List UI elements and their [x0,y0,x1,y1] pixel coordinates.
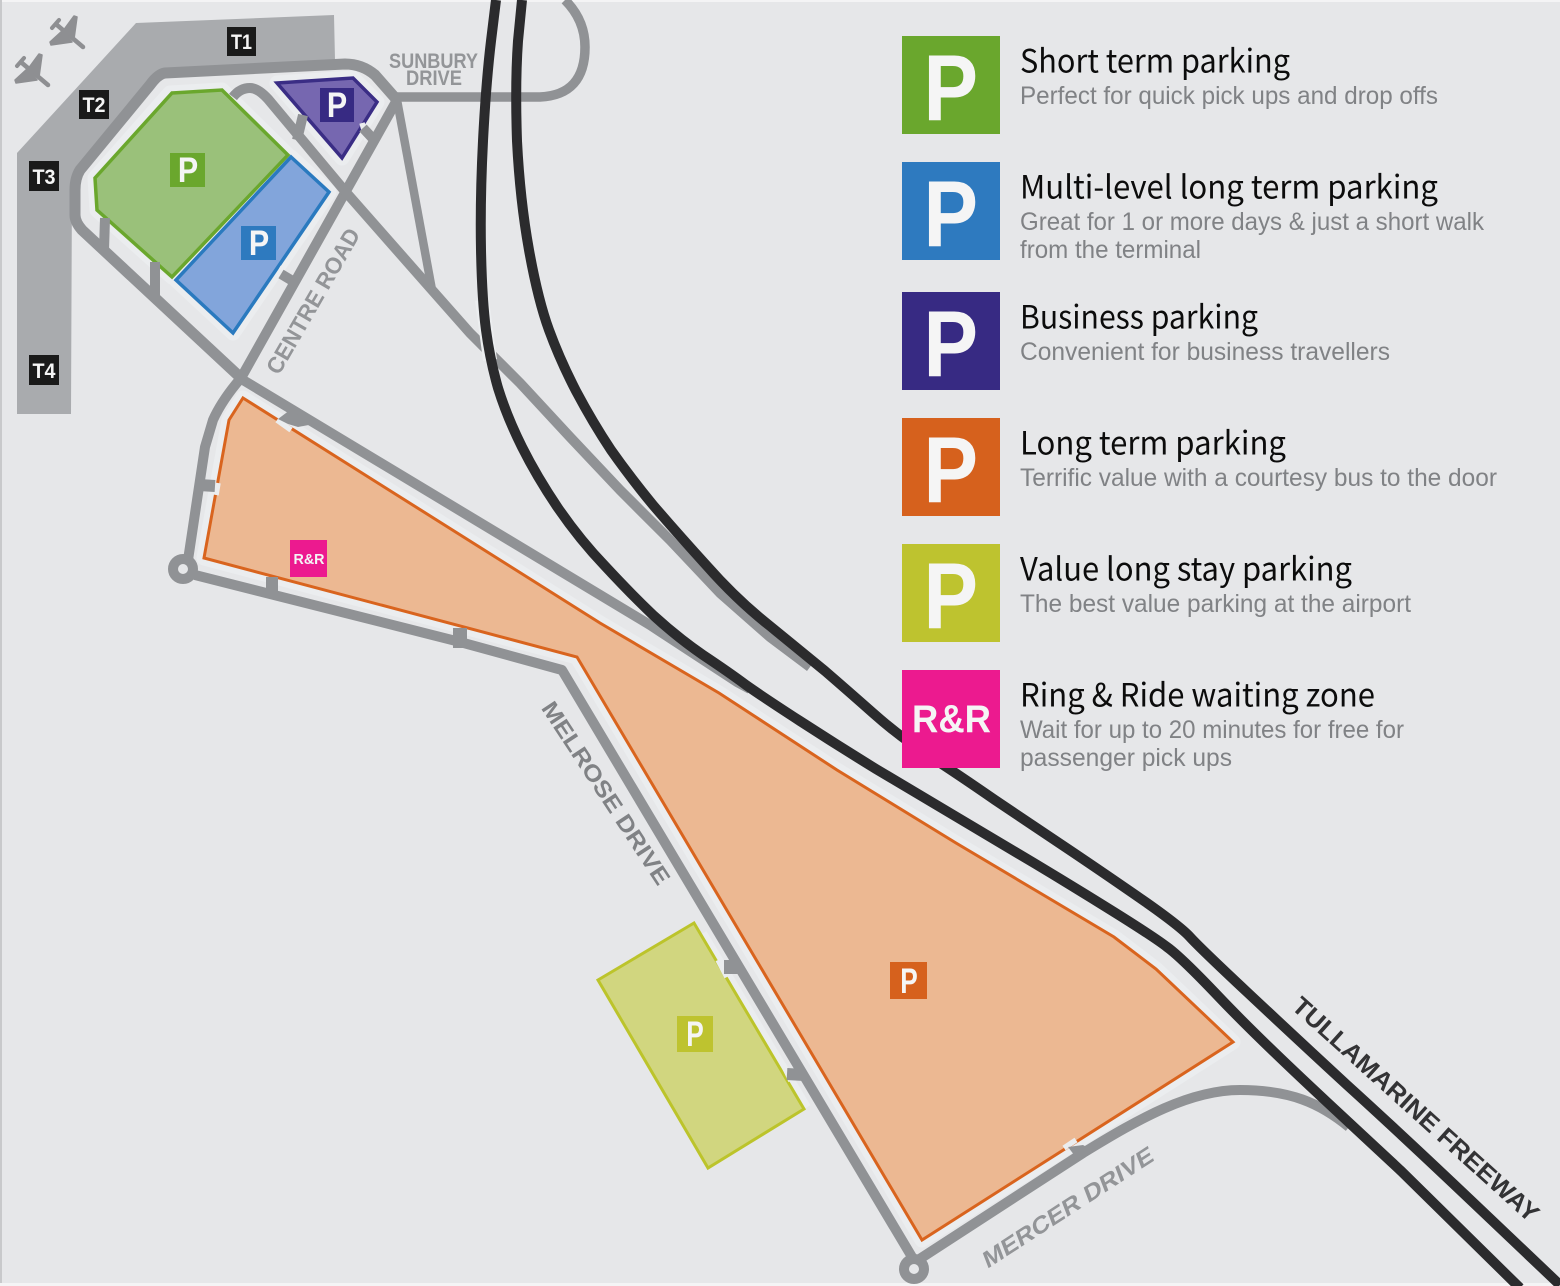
legend: ring and ride waiting zone [902,670,1404,772]
legend: value long stay parking: Value long stay parking [1020,544,1352,590]
road label: Centre Road: CENTRE ROAD [261,223,365,379]
parking area: multi-level (blue) [176,157,329,333]
map marker: business P: P [327,85,347,124]
legend: ring and ride waiting zone: R&R [912,698,991,741]
legend: multi-level long term parking: from the terminal [1020,236,1201,264]
legend: long term parking: P [924,417,978,522]
legend: value long stay parking: The best value parking at the airport [1020,590,1411,618]
map marker: multi-level P: P [249,223,269,262]
terminal marker T1: T1 [231,31,252,54]
road label: Tullamarine Freeway: TULLAMARINE FREEWAY [1286,992,1545,1228]
legend: short term parking: Short term parking [1020,36,1290,82]
legend: ring and ride waiting zone: passenger pick ups [1020,744,1232,772]
terminal marker T3 [29,161,59,191]
road connectors into car parks [104,115,1092,1160]
legend: business parking: Business parking [1020,292,1258,338]
parking area: business (purple) [277,78,377,158]
map marker: ring and ride [290,540,327,577]
legend: business parking: Convenient for business travellers [1020,338,1390,366]
map marker: multi-level P [241,223,276,262]
legend: ring and ride waiting zone: Ring & Ride waiting zone [1020,670,1375,716]
terminal marker T3: T3 [32,166,56,189]
legend: long term parking: Terrific value with a courtesy bus to the door [1020,464,1497,492]
legend: ring and ride waiting zone: Wait for up to 20 minutes for free for [1020,716,1404,744]
legend: value long stay parking [902,543,1411,648]
legend: multi-level long term parking [902,161,1484,266]
terminal marker T1 [227,27,256,56]
road label: Melrose Drive: MELROSE DRIVE [536,696,676,890]
legend: value long stay parking: P [924,543,978,648]
map marker: long term P [890,961,927,1001]
parking area: long term (orange) [204,398,1233,1240]
map marker: ring and ride: R&R [294,551,325,568]
terminal marker T4: T4 [32,360,56,383]
legend: business parking [902,291,1390,396]
legend: short term parking [902,35,1438,140]
legend: short term parking: P [924,35,978,140]
map marker: business P [320,85,354,124]
parking area: short term (green) [95,90,288,277]
road label: Sunbury Drive [389,50,478,90]
legend: multi-level long term parking: P [924,161,978,266]
terminal building [17,15,335,414]
terminal marker T4 [29,355,59,385]
icon: aeroplanes [15,16,83,85]
map marker: value P [677,1014,713,1054]
Tullamarine Freeway carriageways [481,0,1560,1286]
legend: multi-level long term parking: Great for 1 or more days & just a short walk [1020,208,1484,236]
parking area: value long stay (yellow-green) [598,923,804,1168]
legend: short term parking: Perfect for quick pick ups and drop offs [1020,82,1438,110]
road label: Sunbury Drive: DRIVE [406,67,462,90]
map marker: value P: P [686,1014,704,1054]
road label: Sunbury Drive: SUNBURY [389,50,478,73]
map marker: short term P: P [178,150,198,189]
legend: long term parking [902,417,1497,522]
road label: Mercer Drive: MERCER DRIVE [979,1140,1157,1274]
legend: long term parking: Long term parking [1020,418,1286,464]
terminal marker T2: T2 [82,94,106,117]
legend: multi-level long term parking: Multi-level long term parking [1020,162,1438,208]
legend: business parking: P [924,291,978,396]
terminal marker T2 [79,90,109,119]
map marker: long term P: P [900,961,918,1001]
map marker: short term P [170,150,205,189]
